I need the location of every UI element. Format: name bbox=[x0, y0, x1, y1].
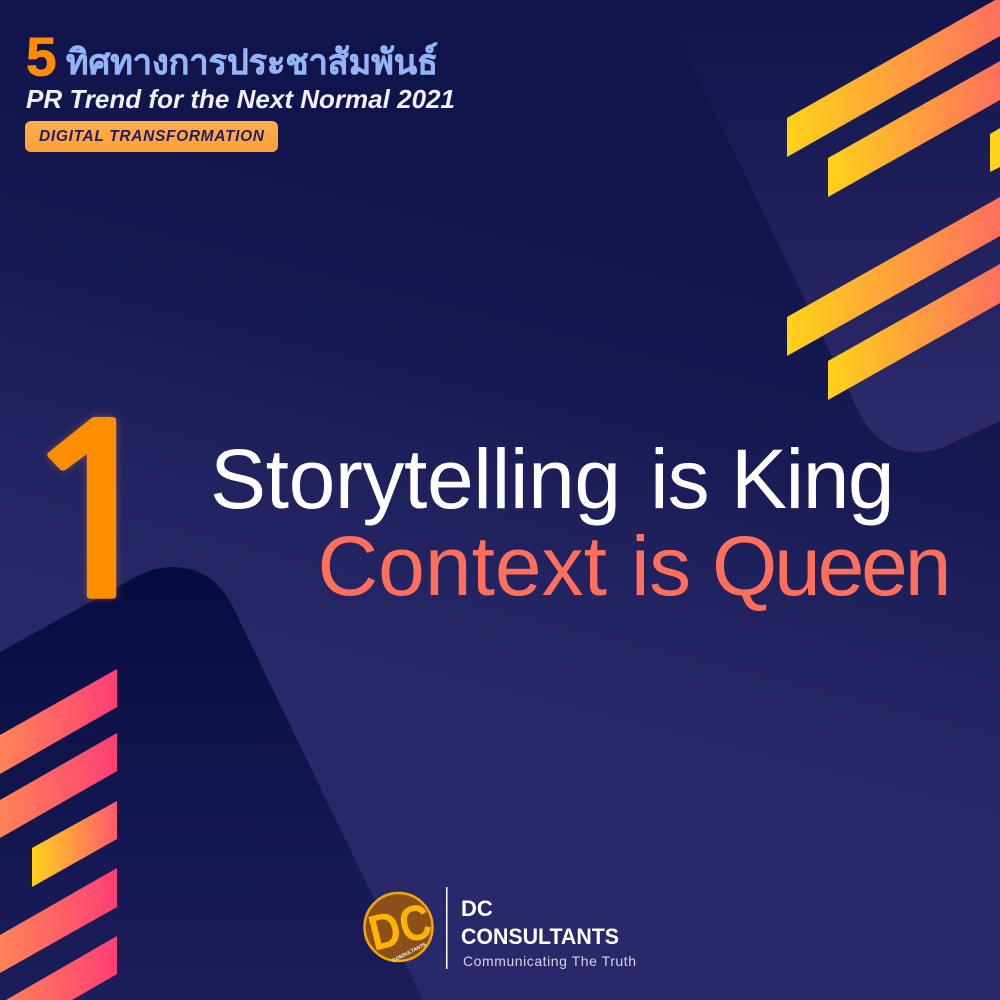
headline bbox=[210, 432, 948, 613]
tag: digital transformation bbox=[25, 121, 278, 152]
company name: DC bbox=[461, 896, 493, 921]
headline line one: is bbox=[650, 432, 709, 526]
divider line bbox=[446, 887, 448, 969]
icon: DC logo: DC bbox=[363, 892, 437, 962]
headline line two: Context bbox=[318, 519, 607, 613]
headline line two: is bbox=[631, 519, 691, 613]
tagline: Communicating The Truth bbox=[463, 953, 636, 969]
logo block: CONSULTANTS bbox=[461, 924, 619, 949]
logo block bbox=[363, 887, 636, 969]
panel: top right shape bbox=[661, 0, 1000, 452]
panel: bottom left shape bbox=[0, 567, 423, 1000]
stripes: bottom left bbox=[0, 669, 117, 1000]
big numeral one: 1 bbox=[12, 398, 179, 634]
big numeral one: 1 bbox=[12, 398, 179, 634]
number five: 5 bbox=[26, 26, 57, 88]
header block bbox=[25, 26, 455, 152]
headline line one: Storytelling bbox=[210, 432, 621, 526]
subtitle: PR Trend for the Next Normal 2021 bbox=[26, 84, 455, 114]
Thai heading: ทิศทางการประชาสัมพันธ์ bbox=[66, 42, 438, 82]
headline line one: King bbox=[731, 432, 893, 526]
headline line two: Queen bbox=[712, 519, 948, 613]
tag: digital transformation: DIGITAL TRANSFORMATION bbox=[39, 128, 265, 145]
icon: DC logo: CONSULTANTS bbox=[392, 942, 428, 964]
stripes: top right bbox=[787, 0, 1000, 400]
